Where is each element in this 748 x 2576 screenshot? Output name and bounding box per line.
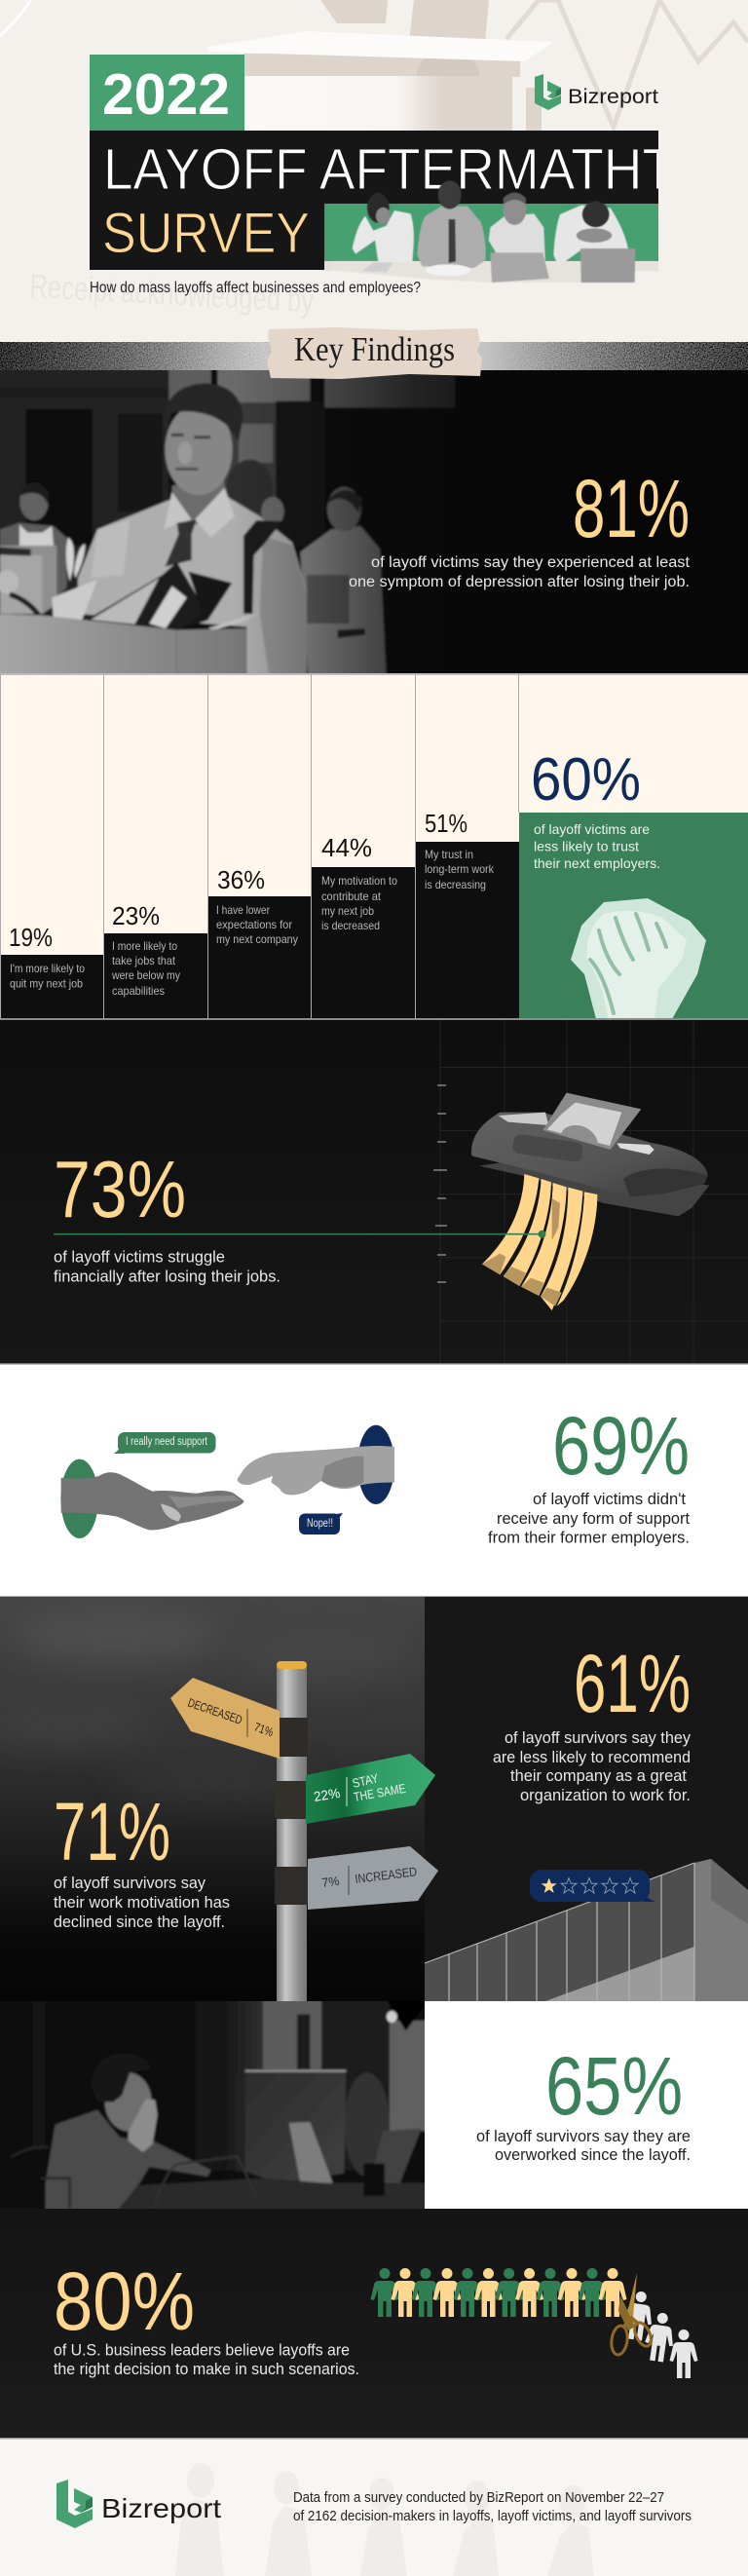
bar: 23%: I more likely to <box>112 939 177 953</box>
stat: 60%: their next employers. <box>534 855 660 871</box>
source note <box>293 2489 692 2524</box>
stat: 73% <box>54 1144 280 1286</box>
panel: overworked stat: 65% <box>545 2040 683 2132</box>
bar: 44%: 44% <box>321 833 372 862</box>
logo: Bizreport header: Bizreport <box>568 86 658 108</box>
stat: 71%: their work motivation has <box>54 1893 230 1912</box>
stat: 71% <box>54 1786 230 1931</box>
stat: 80%: 80% <box>54 2255 195 2347</box>
stat: 69% <box>488 1400 690 1547</box>
stat: 61% <box>493 1638 691 1804</box>
bar: 51%: long-term work <box>425 862 495 876</box>
bar: 36%: I have lower <box>216 903 270 917</box>
sign: stay the same: 22% <box>313 1785 341 1804</box>
bar: 23%: 23% <box>112 901 160 930</box>
leader line <box>54 1231 545 1238</box>
bar: 19%: quit my next job <box>10 976 83 990</box>
logo: Bizreport footer: Bizreport <box>101 2493 221 2523</box>
panel: overworked stat <box>425 2001 748 2209</box>
bar: 36% <box>207 865 311 1019</box>
bar: 51%: 51% <box>425 809 468 838</box>
bar: 44%: contribute at <box>321 890 382 903</box>
stat: 60%: of layoff victims are <box>534 821 650 837</box>
icon: clasped hands <box>571 898 706 1019</box>
stat: 60%: less likely to trust <box>534 838 639 853</box>
signpost <box>170 1661 438 2001</box>
illustration: shredder with money <box>471 1093 709 1310</box>
stat: 81%: one symptom of depression after losing their job. <box>349 574 690 590</box>
photo: office building <box>425 1859 748 2001</box>
photo: four stressed workers <box>331 180 657 283</box>
header background <box>0 0 748 343</box>
bar: 44%: my next job <box>321 904 374 918</box>
icon: laid off people <box>621 2290 697 2378</box>
panel: business leaders <box>0 2209 748 2439</box>
logo: Bizreport header <box>535 74 658 110</box>
stat: 81%: of layoff victims say they experienced at least <box>371 554 691 571</box>
illustration: hands reaching <box>60 1425 394 1538</box>
panel: support <box>0 1363 748 1597</box>
stat: 81%: 81% <box>573 463 690 554</box>
stat: 69%: of layoff victims didn't <box>533 1490 686 1508</box>
photo: overworked man at desk <box>0 2001 425 2209</box>
footer <box>0 2438 748 2576</box>
sign: decreased <box>170 1678 280 1759</box>
bar: 23%: were below my <box>111 968 180 982</box>
bar: 44% <box>311 833 415 1019</box>
title: Layoff Aftermath: LAYOFF AFTERMATHT <box>103 137 675 202</box>
panel: overworked stat: of layoff survivors say they are <box>476 2127 691 2145</box>
source note: of 2162 decision-makers in layoffs, layoff victims, and layoff survivors <box>293 2508 692 2524</box>
bar chart panel <box>0 673 748 1019</box>
logo: Bizreport footer <box>56 2480 221 2528</box>
bar: 19% <box>0 923 103 1019</box>
sign: decreased: DECREASED <box>186 1696 243 1727</box>
header background: Receipt acknowledged by <box>29 268 315 320</box>
stat: 61%: their company as a great <box>510 1766 687 1785</box>
sign: decreased: 71% <box>252 1721 275 1739</box>
sign: stay the same <box>306 1754 435 1824</box>
stat: 61%: are less likely to recommend <box>493 1748 691 1766</box>
sign: increased: 7% <box>321 1874 341 1890</box>
speech bubble: I really need support: I really need support <box>126 1436 208 1448</box>
icon: scissors <box>610 2273 654 2356</box>
sign: increased <box>308 1846 438 1910</box>
stat: 60% <box>519 746 748 1019</box>
badge: 2022 <box>90 55 244 131</box>
title: Survey: SURVEY <box>102 202 310 265</box>
footer silhouettes <box>175 2463 594 2576</box>
stat: 61%: 61% <box>574 1638 691 1729</box>
speech bubble: I really need support <box>114 1432 216 1454</box>
stat: 80% <box>54 2255 359 2378</box>
subtitle: How do mass layoffs affect businesses and employees? <box>90 280 421 296</box>
speech bubble: Nope!!: Nope!! <box>307 1518 333 1530</box>
bar: 36%: 36% <box>217 865 265 894</box>
bar: 51%: is decreasing <box>425 878 486 891</box>
stat: 61%: of layoff survivors say they <box>505 1728 691 1747</box>
key findings tag: Key Findings <box>294 330 455 368</box>
stat: 69%: receive any form of support <box>497 1509 690 1528</box>
stat: 73%: of layoff victims struggle <box>54 1247 225 1267</box>
stat: 69%: from their former employers. <box>488 1528 690 1547</box>
bar: 19%: I'm more likely to <box>10 962 85 975</box>
bar: 36%: expectations for <box>216 918 292 931</box>
bar: 51% <box>415 809 519 1019</box>
panel: shredder <box>0 1020 748 1364</box>
panel: recommend <box>425 1597 748 2001</box>
stat: 60%: 60% <box>531 746 641 814</box>
panel: overworked stat: overworked since the layoff. <box>495 2145 691 2164</box>
stat: 71%: declined since the layoff. <box>54 1913 225 1931</box>
pole <box>275 1661 308 2001</box>
title block <box>90 131 675 271</box>
bar: 23%: take jobs that <box>112 954 176 967</box>
stat: 69%: 69% <box>552 1400 690 1492</box>
sign: increased: INCREASED <box>355 1864 418 1886</box>
stat: 71%: 71% <box>54 1786 170 1877</box>
stat: 80%: the right decision to make in such scenarios. <box>54 2360 359 2378</box>
bar: 51%: My trust in <box>425 848 473 861</box>
bar: 36%: my next company <box>216 932 298 946</box>
bar: 44%: is decreased <box>321 919 380 932</box>
speech bubble: Nope!! <box>299 1513 343 1534</box>
rating bubble <box>530 1870 655 1902</box>
bar: 23% <box>103 901 207 1019</box>
stat: 71%: of layoff survivors say <box>54 1874 206 1892</box>
key findings tag <box>267 327 482 379</box>
source note: Data from a survey conducted by BizReport on November 22–27 <box>293 2489 664 2506</box>
stat: 73%: 73% <box>54 1144 186 1234</box>
sign: stay the same: STAY <box>351 1770 380 1791</box>
panel: work motivation <box>0 1597 425 2001</box>
badge: 2022: 2022 <box>102 62 230 127</box>
icon: row of people <box>370 2268 627 2317</box>
photo: laid off man carrying a box <box>0 363 748 689</box>
stat: 80%: of U.S. business leaders believe layoffs are <box>54 2340 350 2360</box>
bar: 19%: 19% <box>9 923 53 952</box>
stat: 61%: organization to work for. <box>520 1786 691 1804</box>
bar: 44%: My motivation to <box>321 874 397 888</box>
sign: stay the same: THE SAME <box>353 1781 407 1804</box>
bar: 23%: capabilities <box>112 984 165 998</box>
stat: 81% <box>349 463 691 590</box>
stat: 73%: financially after losing their jobs. <box>54 1267 280 1286</box>
torn paper band <box>0 342 748 371</box>
icon: gold star <box>542 1878 557 1893</box>
